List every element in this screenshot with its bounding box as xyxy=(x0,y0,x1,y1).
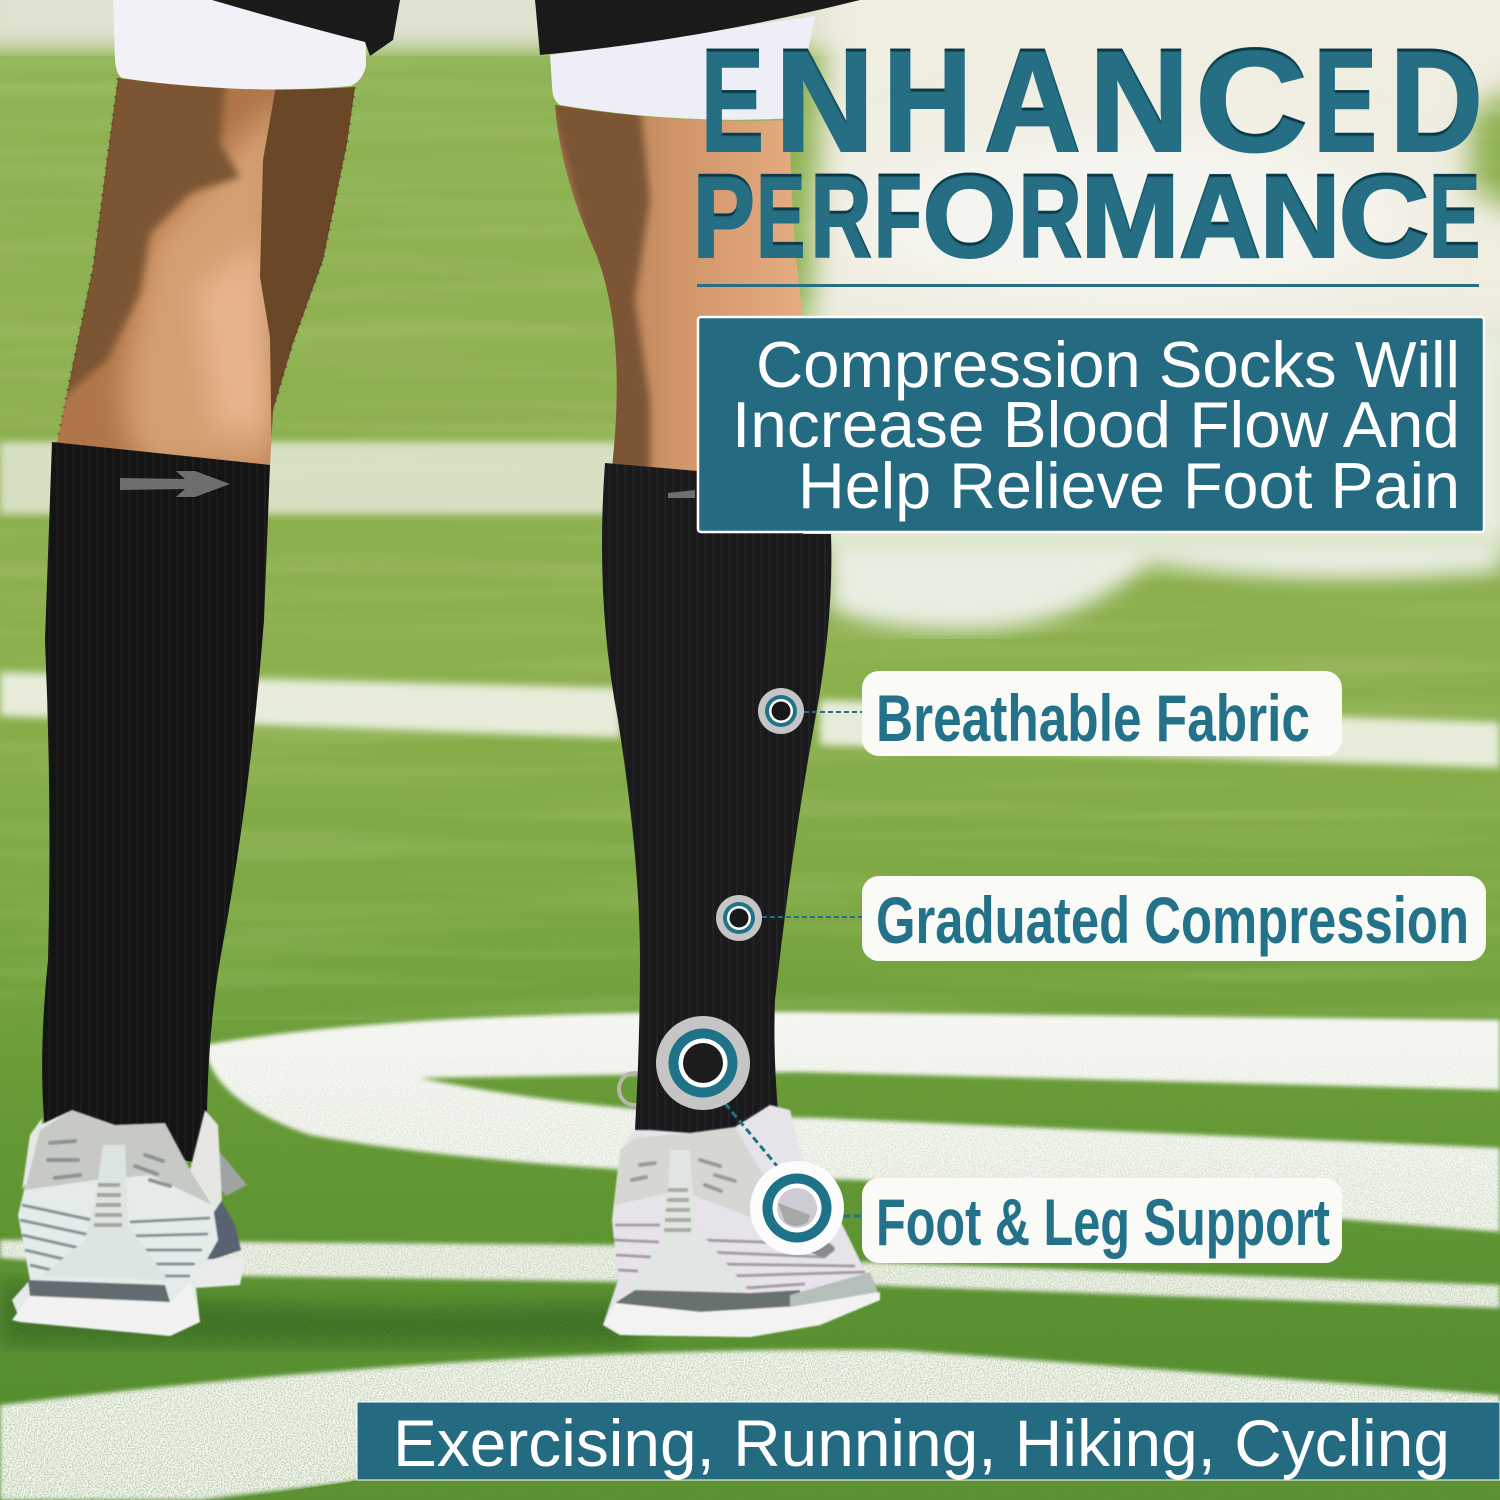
skin: right calf xyxy=(555,105,802,471)
callout: foot and leg support xyxy=(656,1016,1342,1263)
sock arrow logo xyxy=(120,471,230,497)
heading: enhanced: C xyxy=(1195,18,1308,182)
shoe: left xyxy=(12,1110,247,1336)
banner: activities: Exercising, Running, Hiking, Cycling xyxy=(393,1406,1450,1480)
dark band xyxy=(615,1290,800,1312)
shoe: right xyxy=(603,1105,880,1337)
marker: breathable fabric xyxy=(758,688,804,734)
left leg xyxy=(12,0,400,1336)
right leg xyxy=(535,0,880,1337)
heel piece xyxy=(625,1150,748,1290)
heading: performance: E xyxy=(757,150,805,282)
skin: left calf xyxy=(50,70,370,470)
heading: enhanced: E xyxy=(1314,18,1377,182)
marker: graduated compression xyxy=(716,895,762,941)
heading: enhanced: H xyxy=(883,18,972,182)
heading: performance: M xyxy=(1081,150,1180,282)
mesh upper xyxy=(25,1110,212,1205)
sock: right xyxy=(602,463,831,1170)
heel piece xyxy=(42,1145,168,1280)
marker: foot xyxy=(750,1161,844,1255)
heading: enhanced: N xyxy=(775,18,874,182)
heading: performance: N xyxy=(1260,150,1340,282)
panel: compression socks statement: Increase Blood Flow And xyxy=(732,388,1460,461)
far side of shoe xyxy=(195,1190,241,1262)
shoe body xyxy=(12,1110,218,1336)
shorts: left xyxy=(113,0,400,90)
callout: breathable fabric: Breathable Fabric xyxy=(876,681,1310,755)
heading: enhanced: N xyxy=(1089,18,1189,182)
heading: performance: C xyxy=(1339,150,1429,282)
heading: performance: R xyxy=(1019,150,1081,282)
leg hair edge xyxy=(57,78,355,443)
heading: performance: R xyxy=(811,150,871,282)
panel: compression socks statement: Compression Socks Will xyxy=(756,328,1460,401)
shorts: right xyxy=(535,0,860,120)
mesh upper xyxy=(615,1127,800,1217)
dark band xyxy=(28,1280,170,1302)
heading: enhanced: E xyxy=(701,18,764,182)
heading: enhanced: A xyxy=(984,18,1080,182)
panel: compression socks statement: Help Relieve Foot Pain xyxy=(798,449,1460,522)
callout: foot and leg support: Foot & Leg Support xyxy=(876,1185,1330,1259)
heading: performance: F xyxy=(874,150,922,282)
heading: performance: A xyxy=(1180,150,1260,282)
sole xyxy=(12,1282,200,1336)
heading: performance: O xyxy=(923,150,1016,282)
title xyxy=(693,18,1483,282)
shoelace loop xyxy=(619,1073,649,1105)
marker: ankle xyxy=(656,1016,750,1110)
panel: compression socks statement xyxy=(698,317,1484,532)
callout: graduated compression xyxy=(716,876,1486,961)
shoe stripes xyxy=(20,1205,210,1276)
heading: enhanced: D xyxy=(1390,18,1483,182)
shoe body xyxy=(603,1105,880,1337)
callout: breathable fabric xyxy=(758,671,1342,756)
heading: performance: P xyxy=(693,150,754,282)
shoe stripes xyxy=(614,1225,865,1288)
sock: left xyxy=(42,442,270,1165)
sole xyxy=(603,1292,880,1337)
